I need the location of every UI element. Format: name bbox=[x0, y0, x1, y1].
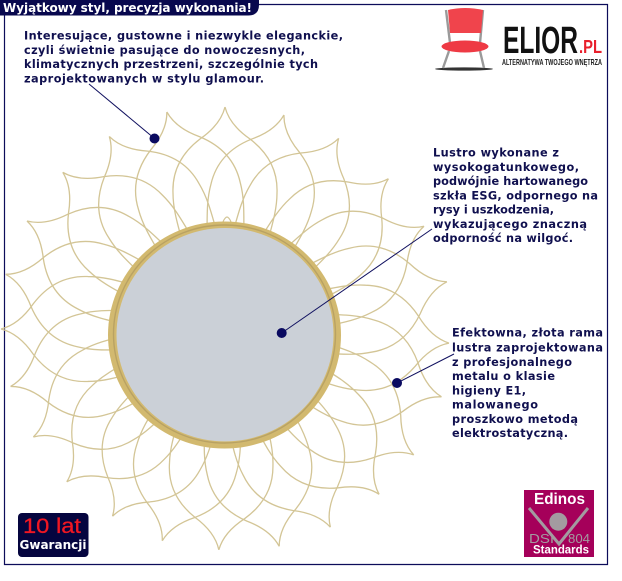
badge: Edinos DSI 804 standards bbox=[524, 490, 594, 557]
mirror glass bbox=[116, 228, 334, 441]
text block: frame description: elektrostatyczną. bbox=[452, 427, 568, 440]
text block: frame description: Efektowna, złota rama bbox=[452, 326, 603, 340]
text block: frame description: higieny E1, bbox=[452, 384, 526, 398]
text block: frame description bbox=[452, 326, 603, 440]
text block: style description: Interesujące, gustowne i niezwykle eleganckie, bbox=[24, 30, 343, 42]
text block: style description: czyli świetnie pasujące do nowoczesnych, bbox=[24, 44, 305, 57]
text block: glass description: rysy i uszkodzenia, bbox=[433, 204, 554, 216]
decorative wire petals bbox=[0, 98, 458, 559]
logo: Elior bbox=[435, 8, 602, 71]
text block: glass description: podwójnie hartowanego bbox=[433, 175, 588, 188]
callout leader: frame bbox=[392, 354, 454, 388]
logo wordmark: ELIOR bbox=[503, 20, 578, 62]
text block: glass description: wykazującego znaczną bbox=[433, 218, 587, 231]
text block: glass description: wysokogatunkowego, bbox=[433, 161, 579, 174]
text block: glass description: Lustro wykonane z bbox=[433, 146, 559, 160]
title tab: Wyjątkowy styl, precyzja wykonania! bbox=[3, 1, 252, 15]
icon: red chair bbox=[435, 8, 493, 71]
callout leader: style bbox=[89, 84, 160, 144]
badge: 10 years warranty: Gwarancji bbox=[20, 538, 87, 552]
text block: frame description: malowanego bbox=[452, 398, 538, 412]
logo: Elior: .PL bbox=[579, 37, 602, 57]
text block: glass description: odporność na wilgoć. bbox=[433, 232, 573, 245]
text block: style description bbox=[24, 30, 343, 86]
text block: glass description: szkła ESG, odpornego na bbox=[433, 190, 598, 202]
hanging hook bbox=[223, 217, 231, 222]
badge: 10 years warranty bbox=[18, 513, 88, 557]
badge: 10 years warranty: 10 lat bbox=[23, 514, 81, 538]
callout leader: glass bbox=[277, 229, 432, 338]
badge: Edinos DSI 804 standards: 804 bbox=[568, 532, 590, 546]
badge: Edinos DSI 804 standards: DSI bbox=[529, 532, 554, 546]
text block: glass description bbox=[433, 146, 598, 245]
text block: frame description: metalu o klasie bbox=[452, 370, 555, 383]
badge: Edinos DSI 804 standards: Standards bbox=[533, 543, 589, 557]
text block: frame description: z profesjonalnego bbox=[452, 356, 572, 369]
text block: style description: klimatycznych przestrzeni, szczególnie tych bbox=[24, 58, 318, 71]
badge: Edinos DSI 804 standards: Edinos bbox=[534, 491, 585, 508]
text block: style description: zaprojektowanych w stylu glamour. bbox=[24, 72, 264, 86]
gold frame bbox=[108, 222, 341, 448]
text block: frame description: lustra zaprojektowana bbox=[452, 342, 603, 354]
text block: frame description: proszkowo metodą bbox=[452, 413, 578, 426]
mirror illustration bbox=[0, 98, 458, 559]
